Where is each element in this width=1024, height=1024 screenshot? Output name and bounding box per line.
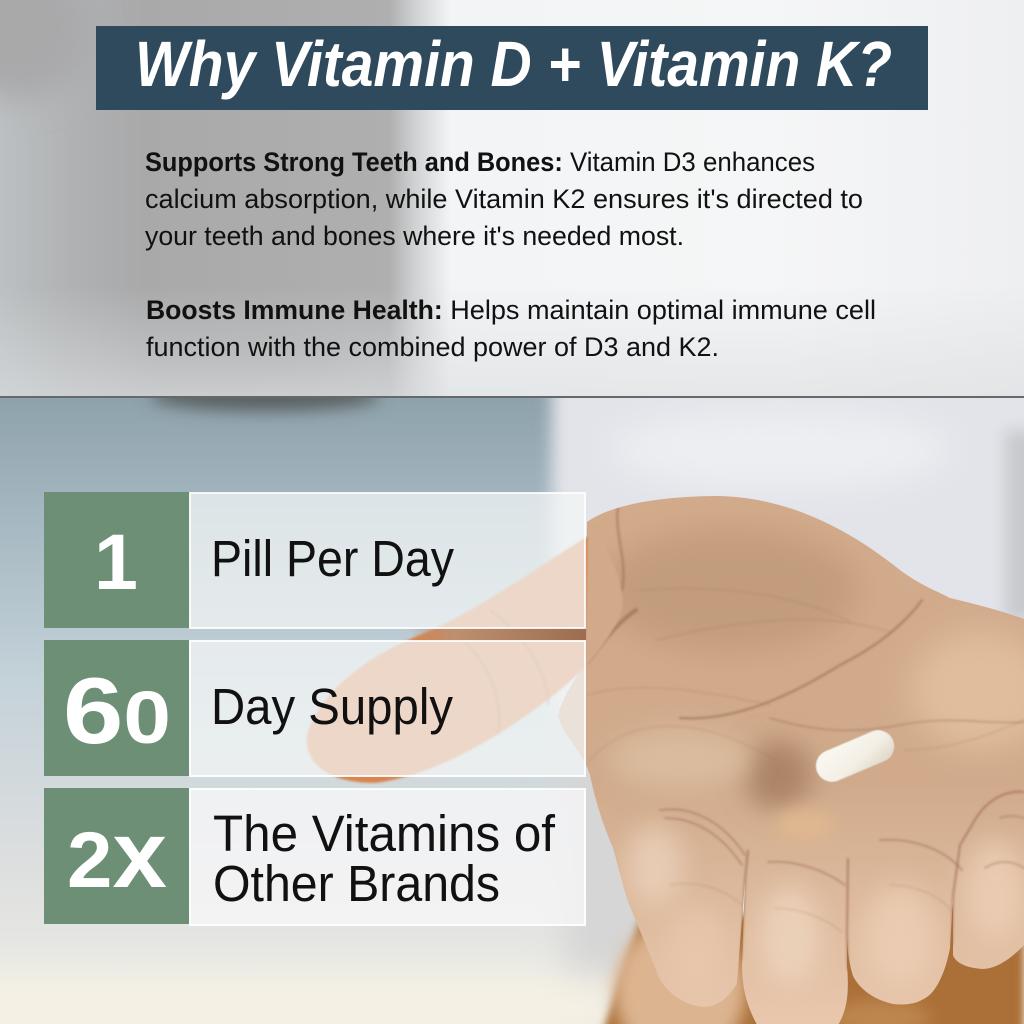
palm creases bbox=[587, 505, 1024, 932]
stat row: 60 day supply: 60 bbox=[63, 658, 171, 763]
gap strip: thumb seen between rows bbox=[410, 628, 586, 640]
finger separations bbox=[741, 792, 1024, 970]
text block: teeth and bones: Supports Strong Teeth and Bones: Vitamin D3 enhances bbox=[145, 147, 815, 177]
text block: teeth and bones: your teeth and bones where it's needed most. bbox=[145, 221, 684, 251]
stat row: 1 pill per day bbox=[44, 492, 585, 628]
text block: teeth and bones bbox=[145, 147, 863, 251]
stat row: 1 pill per day: Pill Per Day bbox=[211, 530, 454, 587]
background: lower photo bbox=[0, 380, 1024, 1024]
stat row: 1 pill per day: 1 bbox=[94, 517, 138, 606]
stat row: 2x the vitamins of other brands bbox=[44, 788, 585, 925]
text block: teeth and bones: calcium absorption, while Vitamin K2 ensures it's directed to bbox=[145, 184, 863, 214]
photo: open hand holding a pill bbox=[307, 480, 1024, 1024]
palm shading bbox=[600, 528, 1024, 841]
text block: immune health: Boosts Immune Health: Helps maintain optimal immune cell bbox=[146, 295, 876, 325]
stat row: 2x the vitamins of other brands: The Vitamins of bbox=[213, 805, 556, 862]
text block: immune health bbox=[146, 295, 876, 362]
fingertip highlights bbox=[627, 825, 1024, 995]
stat row: 60 day supply: Day Supply bbox=[211, 678, 453, 735]
stat row: 2x the vitamins of other brands: 2x bbox=[67, 802, 167, 908]
pill bbox=[816, 730, 894, 782]
palm and fingers silhouette bbox=[540, 480, 1024, 1024]
text block: immune health: function with the combined power of D3 and K2. bbox=[146, 332, 719, 362]
title banner bbox=[96, 26, 928, 110]
top frosted panel background bbox=[0, 0, 1024, 398]
title: Why Vitamin D + Vitamin K? bbox=[135, 28, 892, 100]
wrist and forearm behind fingers bbox=[600, 900, 1024, 1024]
stat row: 2x the vitamins of other brands: Other Brands bbox=[213, 855, 500, 912]
stat row: 60 day supply bbox=[44, 640, 585, 776]
thumb bbox=[307, 528, 622, 783]
